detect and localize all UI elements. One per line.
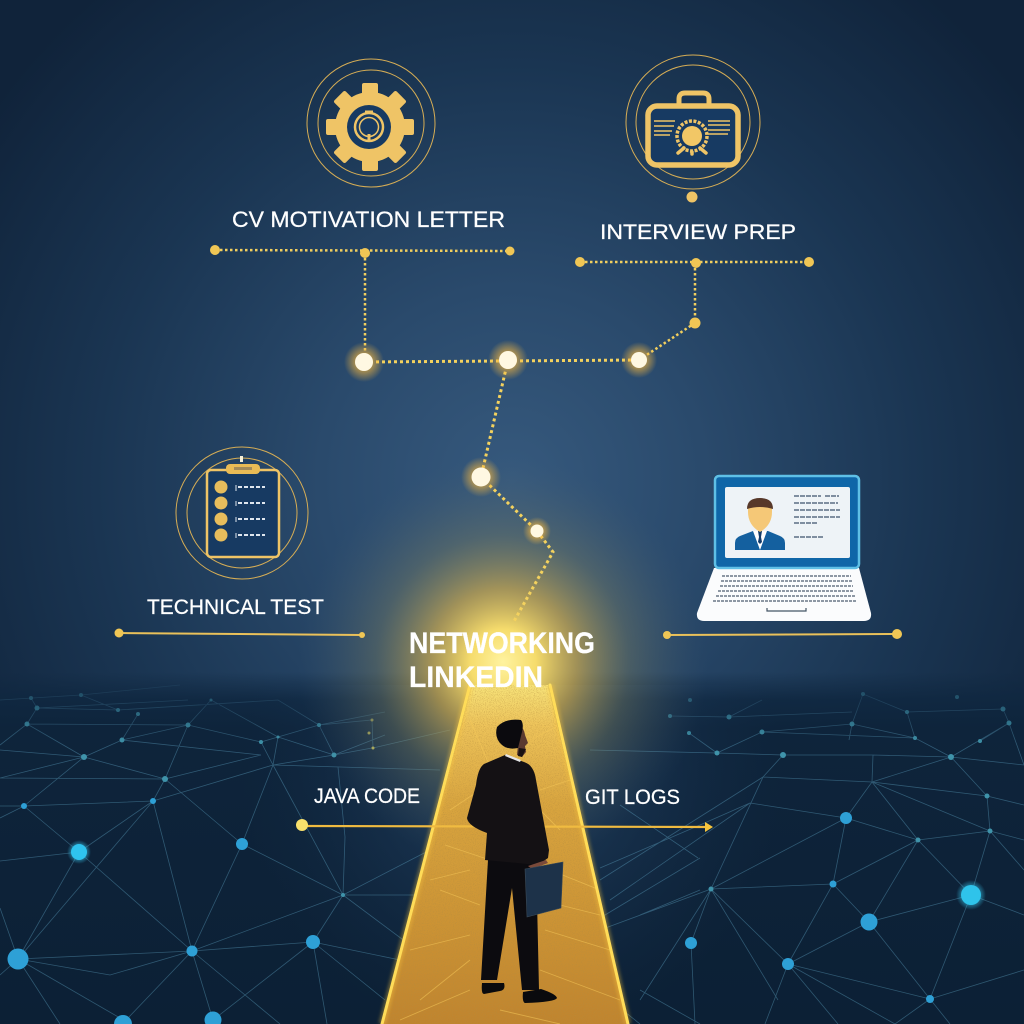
connector: interview line: [580, 262, 809, 360]
hand: [528, 860, 548, 869]
icon: briefcase: [626, 55, 760, 189]
person with briefcase: [467, 720, 563, 1003]
network nodes: [24, 692, 1012, 897]
golden glow: [280, 450, 730, 880]
label: networking linkedin: [409, 627, 595, 694]
profile text lines: [794, 496, 840, 537]
connector dots: CV line: [210, 245, 514, 258]
network ground: [0, 672, 1024, 1024]
icon: clipboard checklist: [176, 447, 308, 579]
label: CV motivation letter: CV MOTIVATION LETTER: [232, 207, 505, 232]
label: git logs: GIT LOGS: [585, 786, 680, 809]
network lines right: [590, 694, 1024, 1024]
path dotted trail: [364, 360, 639, 623]
road edges: [382, 685, 628, 1024]
collar: [505, 754, 521, 762]
golden road: [380, 685, 630, 1024]
icon: gear: [307, 59, 435, 187]
label: networking linkedin: LINKEDIN: [409, 661, 543, 694]
network lines left: [0, 685, 450, 1024]
legs: [481, 860, 539, 990]
road veins: [400, 720, 620, 1024]
label: technical test: TECHNICAL TEST: [147, 596, 324, 619]
beard: [518, 748, 526, 757]
milestone nodes: [344, 340, 657, 545]
connector: CV line: [215, 250, 510, 362]
label: java code: JAVA CODE: [314, 785, 420, 808]
hair: [496, 720, 523, 749]
face: [517, 724, 528, 757]
arrow: java to git: [296, 819, 713, 832]
underline: technical test: [114, 628, 365, 638]
carried briefcase: [525, 862, 563, 917]
trackpad: [767, 608, 806, 611]
connector dot below briefcase: [686, 192, 698, 202]
shoes: [482, 983, 557, 1003]
label: networking linkedin: NETWORKING: [409, 627, 595, 660]
profile avatar: [735, 498, 785, 550]
underline: laptop: [663, 629, 902, 639]
jacket: [467, 755, 549, 865]
icon: laptop with profile: [697, 476, 871, 621]
keyboard text lines: [713, 576, 857, 601]
laptop base: [697, 568, 871, 621]
connector dots: interview line: [575, 257, 814, 328]
laptop screen: [715, 476, 859, 568]
label: interview prep: INTERVIEW PREP: [600, 221, 796, 244]
